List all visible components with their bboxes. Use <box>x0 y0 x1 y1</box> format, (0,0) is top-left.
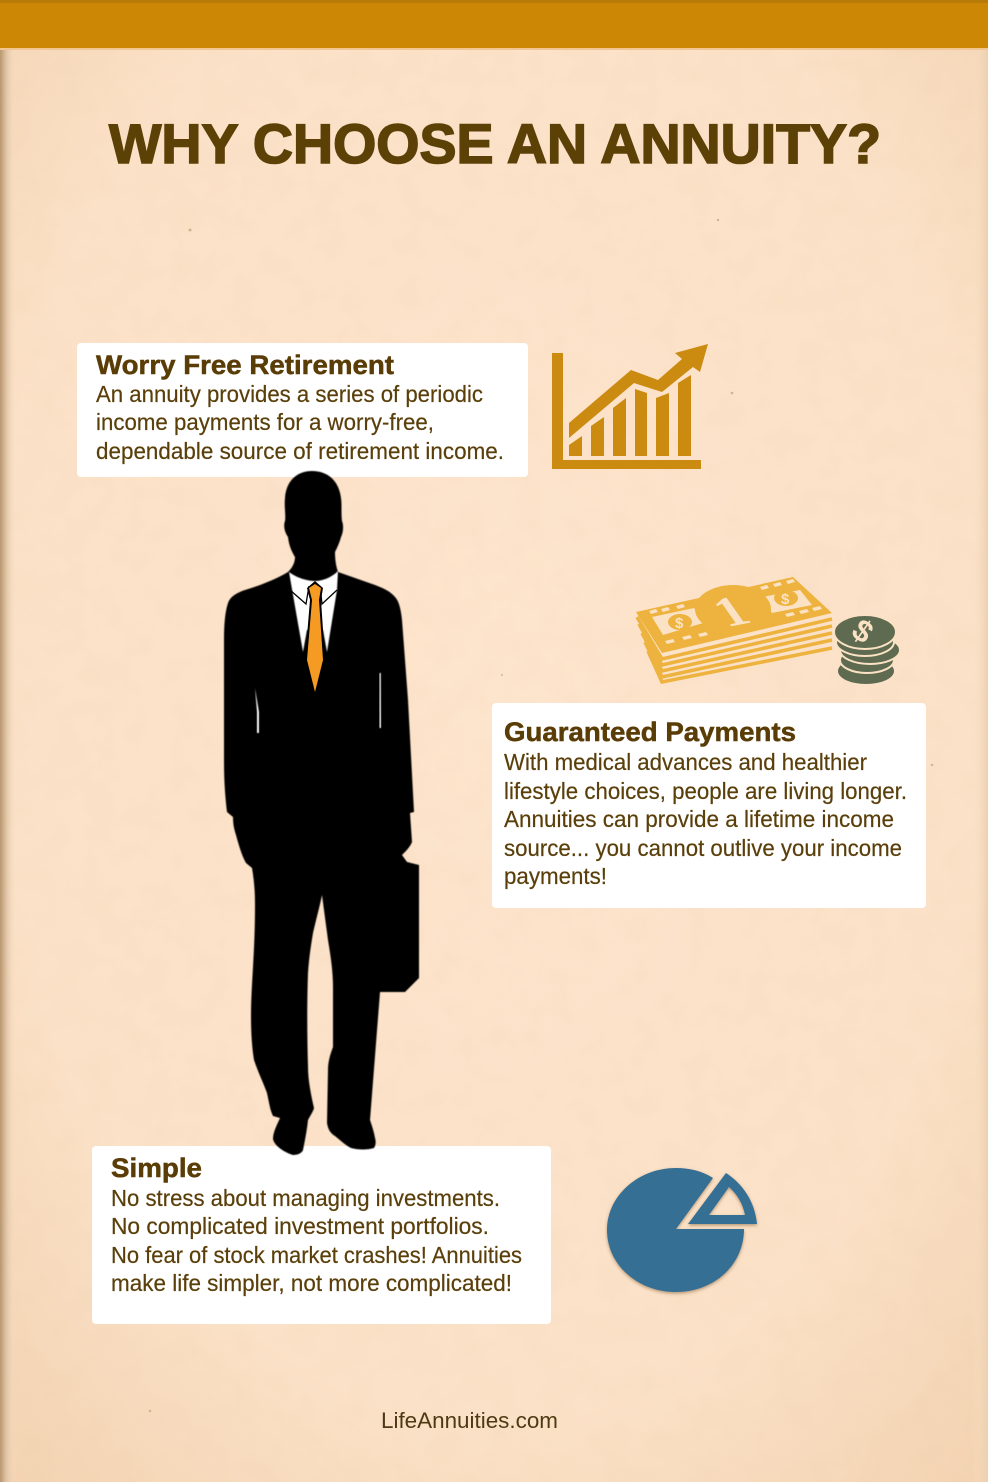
text: worry free retirement body <box>96 381 504 464</box>
text: worry free retirement body: An annuity provides a series of periodic <box>96 381 483 407</box>
icon: stack of dollar bills <box>636 577 832 682</box>
footer: website: LifeAnnuities.com <box>381 1408 558 1433</box>
icon: growth bar chart with arrow <box>552 344 708 469</box>
panel: worry free retirement <box>77 343 528 477</box>
title: WHY CHOOSE AN ANNUITY? <box>109 112 881 175</box>
heading: worry free retirement: Worry Free Retirement <box>96 350 394 380</box>
bill ornaments <box>649 579 822 644</box>
text: simple body: make life simpler, not more complicated! <box>111 1270 512 1296</box>
tie outline <box>305 581 325 695</box>
bill ornaments: $ <box>675 615 684 632</box>
heading: simple: Simple <box>111 1153 202 1183</box>
heading: guaranteed payments: Guaranteed Payments <box>504 717 796 747</box>
text: guaranteed payments body: source... you cannot outlive your income <box>504 835 902 861</box>
text: simple body: No complicated investment portfolios. <box>111 1213 489 1239</box>
collar lines <box>290 586 337 604</box>
tie <box>307 584 323 692</box>
bill layers <box>637 617 832 682</box>
text: simple body <box>111 1185 522 1296</box>
icon: pie chart <box>607 1168 757 1292</box>
silhouette body <box>224 471 419 1155</box>
text: guaranteed payments body: With medical advances and healthier <box>504 749 867 775</box>
text: worry free retirement body: dependable source of retirement income. <box>96 438 504 464</box>
text: guaranteed payments body: payments! <box>504 863 607 889</box>
shirt <box>289 571 338 652</box>
text: simple body: No stress about managing investments. <box>111 1185 500 1211</box>
icon: coin stack <box>834 612 900 684</box>
text: worry free retirement body: income payments for a worry-free, <box>96 409 434 435</box>
figure: businessman silhouette <box>224 471 419 1155</box>
panel: guaranteed payments <box>492 703 926 908</box>
top banner <box>0 0 988 50</box>
bill ornaments: 1 <box>703 588 760 636</box>
icon: coin stack: $ <box>846 612 880 650</box>
text: simple body: No fear of stock market crashes! Annuities <box>111 1242 522 1268</box>
text: guaranteed payments body <box>504 749 907 889</box>
jacket pocket slits <box>255 688 259 733</box>
text: guaranteed payments body: Annuities can provide a lifetime income <box>504 806 894 832</box>
bill ornaments: $ <box>781 591 790 608</box>
text: guaranteed payments body: lifestyle choices, people are living longer. <box>504 778 907 804</box>
panel: simple <box>92 1146 551 1324</box>
